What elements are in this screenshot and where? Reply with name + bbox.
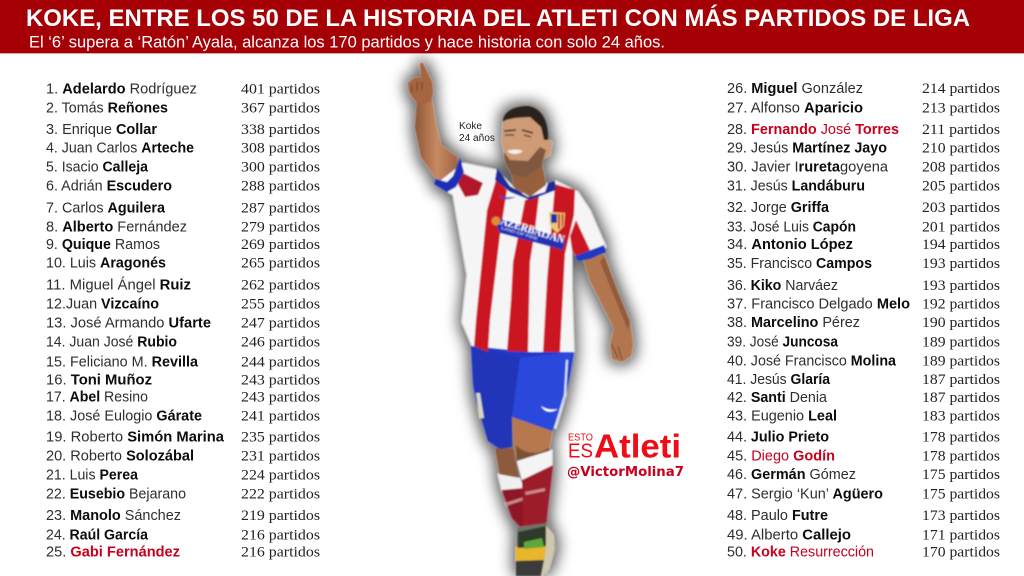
row 45: 178 partidos	[922, 448, 1000, 464]
row 32: 32. Jorge Griffa	[727, 200, 830, 216]
row 1: 1. Adelardo Rodríguez	[46, 82, 197, 98]
row 7: 7. Carlos Aguilera	[46, 200, 166, 216]
row 2: 2. Tomás Reñones	[46, 100, 168, 116]
row 10: 10. Luis Aragonés	[46, 256, 166, 272]
row 38: 190 partidos	[922, 315, 1000, 331]
row 12: 12.Juan Vizcaíno	[46, 296, 159, 312]
caption: Koke, 24 años: Koke	[459, 121, 482, 132]
row 48: 48. Paulo Futre	[727, 508, 828, 524]
row 37: 192 partidos	[922, 296, 1000, 312]
row 3	[46, 122, 320, 138]
row 33: 33. José Luis Capón	[727, 220, 856, 236]
row 37: 37. Francisco Delgado Melo	[727, 296, 910, 312]
nike logo	[499, 193, 516, 199]
row 3: 3. Enrique Collar	[46, 122, 157, 138]
row 24: 216 partidos	[241, 528, 320, 544]
neck	[511, 160, 546, 197]
sponsor band: LAND OF FIRE	[501, 225, 539, 241]
row 44	[727, 430, 1000, 446]
row 7	[46, 200, 320, 216]
row 29	[727, 140, 1000, 156]
brand logo: Esto es Atleti: ESTO	[568, 432, 593, 444]
row 44: 178 partidos	[922, 430, 1000, 446]
row 1: 401 partidos	[241, 82, 320, 98]
row 28: 211 partidos	[922, 122, 1000, 138]
row 14	[46, 334, 320, 350]
row 47: 47. Sergio ‘Kun’ Agüero	[727, 486, 883, 502]
row 6: 6. Adrián Escudero	[46, 178, 172, 194]
row 35: 193 partidos	[922, 256, 1000, 272]
row 47: 175 partidos	[922, 486, 1000, 502]
row 25: 216 partidos	[241, 544, 320, 560]
row 32: 203 partidos	[922, 200, 1000, 216]
row 40: 40. José Francisco Molina	[727, 354, 897, 370]
row 24	[46, 528, 320, 544]
row 42: 187 partidos	[922, 390, 1000, 406]
row 32	[727, 200, 1000, 216]
row 41: 41. Jesús Glaría	[727, 372, 831, 388]
row 16	[46, 372, 320, 388]
row 20	[46, 448, 320, 464]
row 28: 28. Fernando José Torres	[727, 122, 899, 138]
row 23: 23. Manolo Sánchez	[46, 508, 181, 524]
sponsor band: AZERBAIJAN	[499, 215, 566, 246]
sleeve cuffs and collar	[434, 158, 606, 261]
twitter handle: @VictorMolina7	[567, 465, 684, 480]
title: KOKE, ENTRE LOS 50 DE LA HISTORIA DEL ATLETI CON MÁS PARTIDOS DE LIGA	[26, 4, 970, 32]
row 36: 193 partidos	[922, 278, 1000, 294]
row 5: 300 partidos	[241, 160, 320, 176]
back leg	[495, 448, 524, 530]
row 50: 50. Koke Resurrección	[727, 544, 874, 560]
row 26: 214 partidos	[922, 81, 1000, 97]
row 38: 38. Marcelino Pérez	[727, 315, 860, 331]
row 50	[727, 544, 1000, 560]
row 39: 39. José Juncosa	[727, 334, 839, 350]
row 17: 17. Abel Resino	[46, 390, 148, 406]
row 15: 244 partidos	[241, 354, 320, 370]
row 48	[727, 508, 1000, 524]
row 43	[727, 408, 1000, 424]
row 34: 194 partidos	[922, 237, 1000, 253]
row 9: 9. Quique Ramos	[46, 237, 160, 253]
row 21	[46, 468, 320, 484]
row 17: 243 partidos	[241, 390, 320, 406]
row 40: 189 partidos	[922, 354, 1000, 370]
row 13	[46, 316, 320, 332]
caption: Koke, 24 años: 24 años	[459, 133, 495, 144]
row 43: 183 partidos	[922, 408, 1000, 424]
row 22	[46, 486, 320, 502]
row 16: 16. Toni Muñoz	[46, 372, 152, 388]
row 18: 18. José Eulogio Gárate	[46, 408, 202, 424]
row 4: 308 partidos	[241, 140, 320, 156]
row 49	[727, 528, 1000, 544]
row 41	[727, 372, 1000, 388]
row 15	[46, 354, 320, 370]
row 45	[727, 448, 1000, 464]
row 40	[727, 354, 1000, 370]
row 27: 213 partidos	[922, 100, 1000, 116]
row 23	[46, 508, 320, 524]
row 25: 25. Gabi Fernández	[46, 544, 180, 560]
row 42	[727, 390, 1000, 406]
row 24: 24. Raúl García	[46, 528, 149, 544]
row 6: 288 partidos	[241, 178, 320, 194]
brand logo: Esto es Atleti: ES	[568, 440, 593, 462]
row 19	[46, 430, 320, 446]
row 33	[727, 220, 1000, 236]
row 29: 29. Jesús Martínez Jayo	[727, 140, 887, 156]
row 30: 30. Javier Iruretagoyena	[727, 160, 889, 176]
row 2: 367 partidos	[241, 100, 320, 116]
row 8: 279 partidos	[241, 220, 320, 236]
row 13: 247 partidos	[241, 316, 320, 332]
row 42: 42. Santi Denia	[727, 390, 828, 406]
row 41: 187 partidos	[922, 372, 1000, 388]
row 12: 255 partidos	[241, 296, 320, 312]
row 49: 171 partidos	[922, 528, 1000, 544]
row 26	[727, 81, 1000, 97]
subtitle: El ‘6’ supera a ‘Ratón’ Ayala, alcanza los 170 partidos y hace historia con solo 24 años.	[29, 34, 665, 52]
brand logo: Esto es Atleti: Atleti	[594, 428, 681, 464]
row 9	[46, 237, 320, 253]
row 38	[727, 315, 1000, 331]
row 8: 8. Alberto Fernández	[46, 220, 187, 236]
right arm and hand	[583, 254, 633, 362]
row 18	[46, 408, 320, 424]
row 15: 15. Feliciano M. Revilla	[46, 354, 199, 370]
row 4	[46, 140, 320, 156]
club crest	[549, 212, 565, 233]
row 5	[46, 160, 320, 176]
row 21: 224 partidos	[241, 468, 320, 484]
row 36: 36. Kiko Narváez	[727, 278, 838, 294]
row 47	[727, 486, 1000, 502]
row 14: 14. Juan José Rubio	[46, 334, 177, 350]
row 49: 49. Alberto Callejo	[727, 528, 851, 544]
row 13: 13. José Armando Ufarte	[46, 316, 211, 332]
row 27: 27. Alfonso Aparicio	[727, 100, 863, 116]
right ranking list: players 26 to 50	[727, 81, 1000, 560]
row 34: 34. Antonio López	[727, 237, 853, 253]
row 43: 43. Eugenio Leal	[727, 408, 837, 424]
row 50: 170 partidos	[922, 544, 1000, 560]
row 37	[727, 296, 1000, 312]
row 9: 269 partidos	[241, 237, 320, 253]
row 20: 231 partidos	[241, 448, 320, 464]
row 46: 46. Germán Gómez	[727, 467, 856, 483]
row 31	[727, 178, 1000, 194]
row 20: 20. Roberto Solozábal	[46, 448, 194, 464]
row 44: 44. Julio Prieto	[727, 430, 829, 446]
left ranking list: players 1 to 25	[46, 82, 320, 560]
red stripes	[458, 172, 590, 352]
boots	[516, 523, 556, 576]
row 16: 243 partidos	[241, 372, 320, 388]
head and face	[502, 106, 552, 177]
raised left arm and pointing hand	[408, 63, 459, 188]
row 22: 22. Eusebio Bejarano	[46, 486, 186, 502]
row 22: 222 partidos	[241, 486, 320, 502]
row 29: 210 partidos	[922, 140, 1000, 156]
row 5: 5. Isacio Calleja	[46, 160, 149, 176]
row 33: 201 partidos	[922, 220, 1000, 236]
row 30: 208 partidos	[922, 160, 1000, 176]
row 31: 31. Jesús Landáburu	[727, 178, 865, 194]
row 34	[727, 237, 1000, 253]
row 19: 235 partidos	[241, 430, 320, 446]
row 2	[46, 100, 320, 116]
row 27	[727, 100, 1000, 116]
row 45: 45. Diego Godín	[727, 448, 835, 464]
header banner	[0, 0, 1024, 54]
row 7: 287 partidos	[241, 200, 320, 216]
front leg and sock	[512, 417, 553, 526]
row 11: 262 partidos	[241, 278, 320, 294]
row 3: 338 partidos	[241, 122, 320, 138]
row 10	[46, 256, 320, 272]
row 26: 26. Miguel González	[727, 81, 863, 97]
row 46	[727, 467, 1000, 483]
row 31: 205 partidos	[922, 178, 1000, 194]
row 18: 241 partidos	[241, 408, 320, 424]
row 6	[46, 178, 320, 194]
row 19: 19. Roberto Simón Marina	[46, 430, 225, 446]
row 21: 21. Luis Perea	[46, 468, 139, 484]
row 4: 4. Juan Carlos Arteche	[46, 140, 194, 156]
row 17	[46, 390, 320, 406]
row 11: 11. Miguel Ángel Ruiz	[46, 276, 191, 294]
row 25	[46, 544, 320, 560]
row 10: 265 partidos	[241, 256, 320, 272]
caption: Koke, 24 años	[459, 121, 495, 144]
row 8	[46, 220, 320, 236]
row 39	[727, 334, 1000, 350]
row 35: 35. Francisco Campos	[727, 256, 872, 272]
row 11	[46, 276, 320, 294]
row 48: 173 partidos	[922, 508, 1000, 524]
row 12	[46, 296, 320, 312]
player illustration: Koke celebrating	[408, 63, 633, 576]
row 14: 246 partidos	[241, 334, 320, 350]
shorts	[471, 346, 574, 449]
row 36	[727, 278, 1000, 294]
row 39: 189 partidos	[922, 334, 1000, 350]
row 28	[727, 122, 1000, 138]
row 46: 175 partidos	[922, 467, 1000, 483]
row 30	[727, 160, 1000, 176]
jersey body	[436, 163, 606, 352]
row 1	[46, 82, 320, 98]
row 23: 219 partidos	[241, 508, 320, 524]
row 35	[727, 256, 1000, 272]
